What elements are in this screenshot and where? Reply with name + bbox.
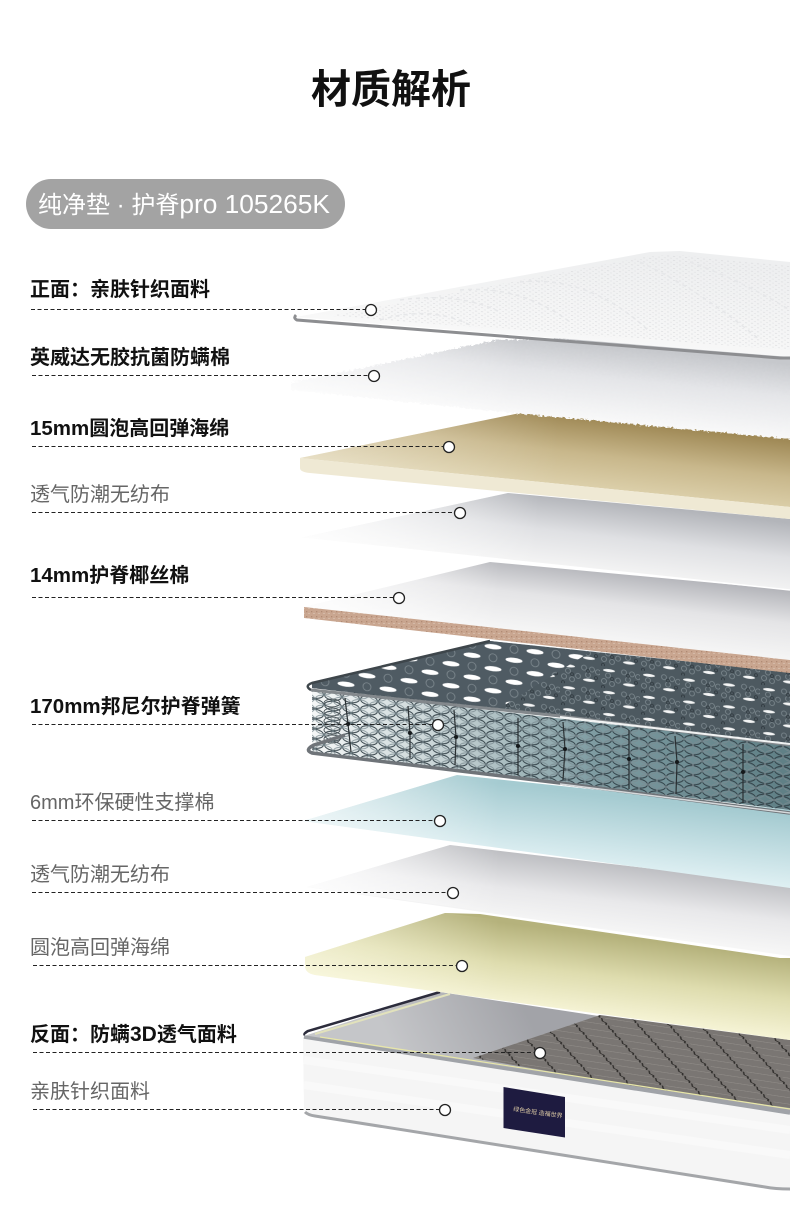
model name pill: [26, 179, 345, 229]
layer: bonnell springs: [308, 641, 790, 813]
callout: non-woven 2: 透气防潮无纺布: [30, 863, 170, 886]
callout: 170mm spring: 170mm邦尼尔护脊弹簧: [30, 694, 241, 718]
callout: 15mm foam: [30, 416, 454, 452]
mattress side panel: [303, 1037, 790, 1190]
layer: anti-mite cotton: [291, 338, 790, 440]
callout: 英威达: 英威达无胶抗菌防螨棉: [30, 345, 230, 369]
callout: round foam: 圆泡高回弹海绵: [30, 936, 170, 959]
callout: 6mm foam: [30, 791, 446, 826]
callout: knit fabric: 亲肤针织面料: [30, 1080, 150, 1103]
callout: 6mm foam: 6mm环保硬性支撑棉: [30, 791, 214, 814]
callout: 14mm coir: 14mm护脊椰丝棉: [30, 564, 189, 587]
side coils: [324, 699, 340, 743]
layer: upper non-woven fabric: [300, 493, 790, 590]
mattress herringbone fabric: [473, 1015, 790, 1108]
callout: 反面: 反面：防螨3D透气面料: [30, 1023, 237, 1046]
model name pill: 纯净垫 · 护脊pro 105265K: [38, 189, 330, 219]
callout: knit fabric: [30, 1080, 450, 1116]
layer: lower non-woven fabric: [307, 845, 790, 956]
layer: mattress base: [303, 992, 790, 1190]
title: 材质解析: [311, 68, 471, 112]
callout: 正面: 正面：亲肤针织面料: [30, 278, 210, 301]
callout: 反面: [30, 1023, 546, 1058]
layer: knit top fabric: [295, 251, 790, 358]
brand label: 绿色金冠 造福世界: [513, 1105, 563, 1120]
quilting lines: [380, 262, 790, 340]
coir pad top: [304, 562, 790, 660]
callout: non-woven 1: 透气防潮无纺布: [30, 483, 170, 506]
callout: 14mm coir: [30, 564, 404, 604]
callout: round foam: [30, 936, 468, 972]
tan foam side: [300, 458, 790, 519]
callout: 英威达: [30, 345, 380, 382]
coir pad side: [304, 607, 790, 673]
layer: tan foam: [300, 413, 790, 519]
callout: 170mm spring: [30, 694, 444, 730]
callout: 正面: [30, 278, 376, 316]
spring top grid: [312, 641, 790, 744]
callout: non-woven 1: [30, 483, 466, 518]
callout: 15mm foam: 15mm圆泡高回弹海绵: [30, 416, 229, 440]
tan foam top: [300, 413, 790, 507]
spring coil core: [312, 690, 790, 810]
spring frame and wires: [308, 641, 790, 813]
layer: yellow foam: [305, 913, 790, 1040]
callout: non-woven 2: [30, 863, 458, 898]
layer: blue support foam: [303, 775, 790, 888]
layer: coir pad: [304, 562, 790, 673]
brand label: [504, 1087, 565, 1138]
mattress top surface: [304, 992, 790, 1112]
